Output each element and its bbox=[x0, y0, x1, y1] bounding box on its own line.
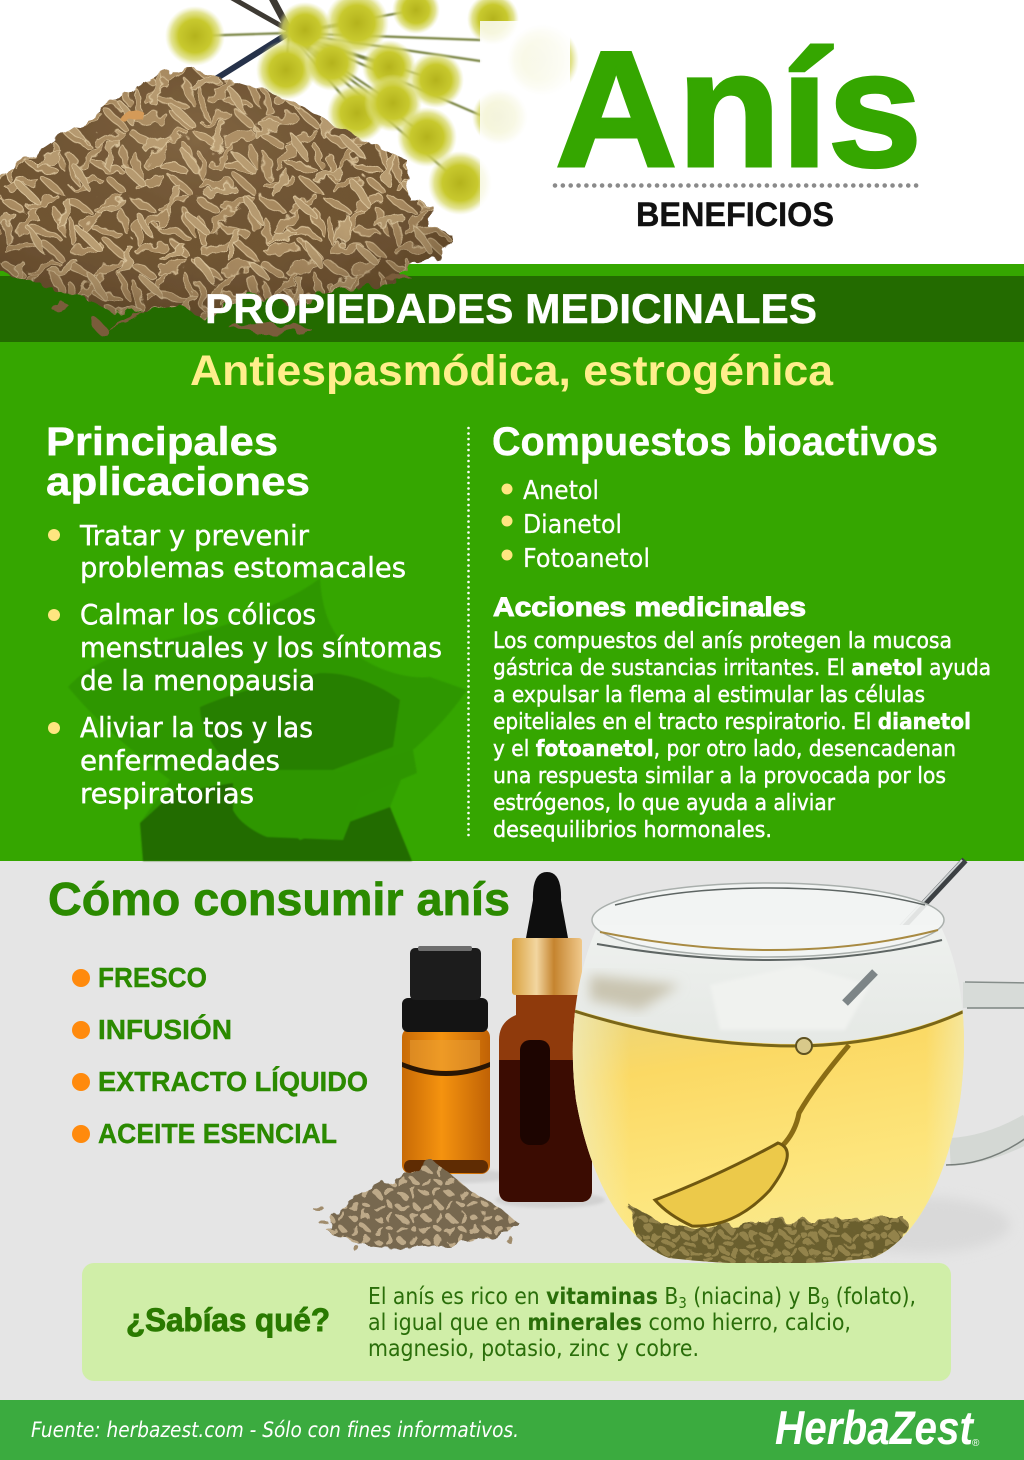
footer bbox=[0, 1400, 1024, 1460]
green band with medicinal properties background bbox=[0, 264, 1024, 342]
applications list: menstruales y los síntomas bbox=[80, 631, 442, 664]
compounds list: Dianetol bbox=[523, 510, 622, 540]
paragraph: medicinal actions: Los compuestos del anís protegen la mucosa bbox=[493, 629, 952, 654]
image: pile of anise seeds bbox=[0, 67, 450, 340]
heading: medicinal properties: PROPIEDADES MEDICINALES bbox=[205, 285, 817, 332]
heading: bioactive compounds: Compuestos bioactivos bbox=[492, 420, 938, 464]
frost on glass bbox=[718, 1007, 854, 1028]
image: glass cup of anise tea with spoon bbox=[560, 860, 1024, 1280]
panel: bioactive compounds bbox=[492, 420, 991, 843]
spoon stem and bowl bbox=[655, 972, 875, 1226]
paragraph: medicinal actions: epiteliales en el tracto respiratorio. El dianetol bbox=[493, 710, 971, 735]
source note: Fuente: herbazest.com - Sólo con fines informativos. bbox=[31, 1418, 519, 1442]
dotted column divider bbox=[467, 428, 470, 838]
applications list bbox=[79, 519, 442, 810]
applications list: problemas estomacales bbox=[80, 551, 406, 584]
callout text: 3 bbox=[678, 1294, 687, 1312]
cup shadow bbox=[830, 1197, 1010, 1253]
callout text: (folato), bbox=[829, 1284, 916, 1310]
callout heading: ¿Sabías qué? bbox=[126, 1302, 330, 1338]
stray seeds bbox=[51, 275, 411, 340]
consumption forms bbox=[98, 962, 368, 1149]
faded flower overlay bbox=[480, 21, 570, 264]
dotted divider under title bbox=[555, 183, 918, 188]
callout: did you know bbox=[82, 1263, 951, 1381]
registered mark: ® bbox=[972, 1438, 980, 1449]
compounds list: Fotoanetol bbox=[523, 544, 650, 574]
spoon handle bbox=[892, 860, 965, 935]
callout text: al igual que en minerales como hierro, calcio, bbox=[368, 1310, 851, 1336]
panel: main green background bbox=[0, 342, 1024, 861]
consumption forms: EXTRACTO LÍQUIDO bbox=[98, 1066, 368, 1097]
applications list: Calmar los cólicos bbox=[80, 598, 316, 631]
callout text: El anís es rico en vitaminas B bbox=[368, 1284, 681, 1310]
flower clusters bbox=[165, 0, 579, 215]
consumption forms: ACEITE ESENCIAL bbox=[98, 1118, 337, 1149]
tea liquid bbox=[572, 1009, 964, 1263]
list: ways to consume bbox=[72, 962, 368, 1149]
flower stems bbox=[195, 0, 480, 183]
callout text: magnesio, potasio, zinc y cobre. bbox=[368, 1336, 699, 1362]
paragraph: medicinal actions: y el fotoanetol, por otro lado, desencadenan bbox=[493, 737, 956, 762]
logo: HerbaZest: HerbaZest bbox=[775, 1401, 975, 1454]
callout text: (niacina) y B bbox=[687, 1284, 821, 1310]
image: orange essential oil bottle bbox=[402, 946, 510, 1183]
callout text bbox=[368, 1284, 916, 1362]
illustration: woman holding her stomach silhouette bbox=[68, 578, 467, 861]
compounds list: Anetol bbox=[523, 476, 599, 506]
callout text: 9 bbox=[821, 1294, 829, 1312]
applications list: Aliviar la tos y las bbox=[80, 711, 313, 744]
image: anise flower umbel bbox=[165, 0, 579, 264]
bubble bbox=[796, 1038, 812, 1054]
applications list: de la menopausia bbox=[80, 664, 315, 697]
consumption forms: INFUSIÓN bbox=[98, 1014, 232, 1045]
heading: how to consume anise: Cómo consumir anís bbox=[48, 873, 510, 925]
title: Anís: Anís bbox=[555, 17, 922, 201]
panel: main applications bbox=[46, 420, 442, 810]
glass body bbox=[572, 925, 964, 1263]
orange bullets bbox=[72, 969, 90, 1143]
applications list: enfermedades bbox=[80, 744, 280, 777]
applications list: Tratar y prevenir bbox=[79, 519, 309, 552]
subheading: antispasmodic, estrogenic: Antiespasmódica, estrogénica bbox=[190, 347, 834, 395]
heading: medicinal actions: Acciones medicinales bbox=[493, 592, 806, 622]
cup rim bbox=[592, 883, 944, 960]
seeds at cup bottom bbox=[630, 1205, 905, 1270]
list bullets bbox=[48, 529, 60, 734]
paragraph: medicinal actions: a expulsar la flema al estimular las células bbox=[493, 683, 925, 708]
subtitle: Beneficios: BENEFICIOS bbox=[636, 196, 834, 234]
image: dropper bottle bbox=[495, 872, 605, 1208]
paragraph: medicinal actions bbox=[493, 629, 991, 843]
consumption forms: FRESCO bbox=[98, 962, 207, 993]
paragraph: medicinal actions: estrógenos, lo que ayuda a aliviar bbox=[493, 791, 836, 816]
paragraph: medicinal actions: gástrica de sustancias irritantes. El anetol ayuda bbox=[493, 656, 991, 681]
liquid surface line bbox=[575, 1010, 963, 1048]
heading: main applications: Principales bbox=[46, 420, 278, 464]
heading: main applications bbox=[46, 420, 310, 504]
image: small pile of anise seeds bbox=[310, 1160, 518, 1253]
paragraph: medicinal actions: una respuesta similar a la provocada por los bbox=[493, 764, 946, 789]
compound bullets bbox=[502, 484, 512, 560]
applications list: respiratorias bbox=[80, 777, 254, 810]
compounds list bbox=[523, 476, 650, 574]
cup handle bbox=[946, 982, 1024, 1165]
heading: main applications: aplicaciones bbox=[46, 460, 310, 504]
paragraph: medicinal actions: desequilibrios hormonales. bbox=[493, 818, 772, 843]
